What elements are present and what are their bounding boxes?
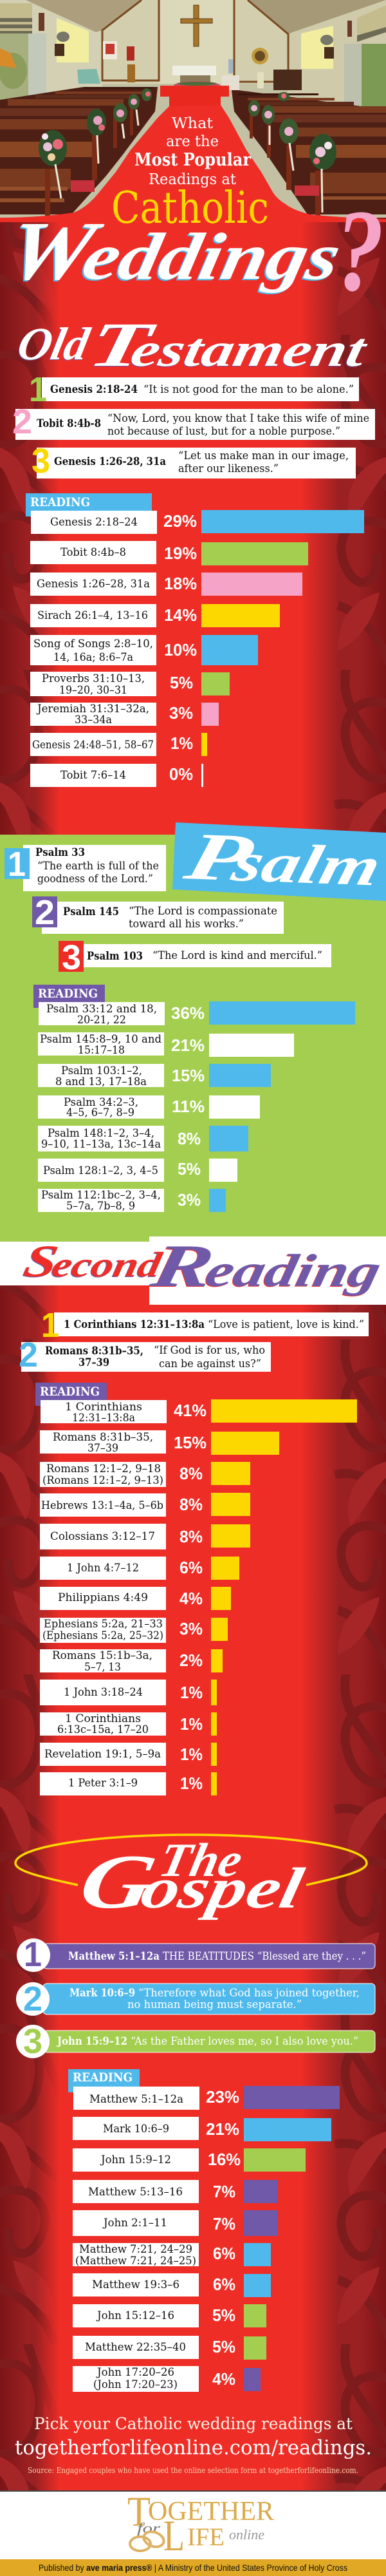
row: Tobit 7: 0%: [169, 764, 193, 784]
row: John 15:12: 5%: [212, 2306, 235, 2325]
heading: The Gospel with halo: The: [154, 1834, 247, 1887]
row: 1 John 4: 6%: [179, 1558, 203, 1577]
row: John 15:9: 16%: [208, 2150, 241, 2169]
top second reading 1: 1 Corinthians 12:31–13:8a: [64, 1318, 205, 1331]
row: Romans 8: 15%: [174, 1433, 207, 1452]
reading tab: [33, 985, 105, 1008]
row: John 15:12: [73, 2304, 266, 2327]
row: 1 Peter: 1%: [180, 1774, 203, 1793]
row: Song of Songs: Song of Songs 2:8–10,: [33, 638, 153, 650]
row: Psalm 33: [39, 1001, 355, 1027]
top reading 3: after our likeness.”: [178, 462, 279, 475]
row: Ephesians: [40, 1618, 228, 1643]
floral pew decorations: [39, 88, 336, 213]
row: Proverbs: [30, 672, 230, 697]
heading: Second Reading: [0, 1232, 386, 1305]
title line: What are the: What: [172, 115, 214, 132]
top gospel 3: [16, 2022, 375, 2061]
title: [0, 115, 384, 316]
row: Psalm 103: 8 and 13, 17–18a: [55, 1075, 147, 1088]
heading: Psalm banner: [172, 819, 386, 901]
top gospel 3: “As the Father loves me, so I also love you.”: [131, 2035, 358, 2048]
row: Genesis 1:26-28: Genesis 1:26–28, 31a: [37, 578, 150, 591]
top second reading 2: [19, 1336, 271, 1374]
reading tab: READING: [38, 987, 98, 1001]
top psalm 1: [5, 845, 166, 891]
row: Philippians: Philippians 4:49: [58, 1591, 148, 1604]
top psalm 1: 1: [8, 845, 26, 884]
row: Psalm 145: 21%: [171, 1036, 205, 1055]
row: Psalm 103: 15%: [172, 1066, 205, 1085]
top gospel 2: no human being must separate.”: [127, 1998, 302, 2011]
icon: wedding rings: [130, 2529, 166, 2551]
top second reading 2: 2: [19, 1336, 38, 1374]
row: Hebrews: [40, 1493, 250, 1517]
top psalm 3: “The Lord is kind and merciful.”: [152, 949, 322, 962]
top psalm 3: Psalm 103: [87, 950, 143, 962]
row: Tobit 8:4b-8: Tobit 8:4b–8: [60, 546, 126, 559]
heading: Old Testament: T: [83, 310, 161, 380]
row: Romans 12: 8%: [179, 1464, 203, 1483]
row: Song of Songs: 10%: [164, 640, 197, 659]
top gospel 2: Mark 10:6–9: [69, 1987, 135, 1999]
row: Psalm 145: Psalm 145:8–9, 10 and: [40, 1033, 161, 1046]
row: Jeremiah: 33–34a: [75, 714, 112, 726]
row: Psalm 112: [38, 1189, 226, 1213]
row: Matthew 5:1: Matthew 5:1–12a: [89, 2093, 183, 2106]
row: Psalm 145: [38, 1032, 294, 1057]
logo: Together for Life online: online: [229, 2526, 264, 2543]
logo: Together for Life online: T: [127, 2488, 151, 2535]
publisher bar: [0, 2559, 386, 2576]
row: Matthew 7: [73, 2243, 271, 2268]
row: Matthew 7: (Matthew 7:21, 24–25): [75, 2255, 196, 2268]
heading: Old Testament: [14, 310, 375, 380]
row: Proverbs: Proverbs 31:10–13,: [42, 672, 145, 685]
reading tab: [26, 493, 152, 516]
bar chart: Gospel readings: [68, 2069, 340, 2392]
row: Colossians: Colossians 3:12–17: [50, 1530, 155, 1543]
top second reading 2: can be against us?”: [159, 1358, 261, 1370]
top second reading 1: “Love is patient, love is kind.”: [208, 1318, 364, 1331]
heading: Psalm banner: salm: [226, 831, 386, 897]
top reading 2: not because of lust, but for a noble purpose.”: [107, 425, 340, 438]
row: Song of Songs: [30, 635, 258, 665]
row: Psalm 128: 5%: [178, 1159, 201, 1179]
heading: Old Testament: Old: [14, 318, 95, 370]
row: Psalm 148: 8%: [178, 1129, 201, 1148]
heading: The Gospel with halo: G: [73, 1839, 163, 1925]
row: Colossians: 8%: [179, 1527, 203, 1546]
row: 1 Corinthians 12: 1 Corinthians: [65, 1401, 142, 1414]
reading tab: READING: [40, 1385, 100, 1399]
row: Revelation: [40, 1743, 217, 1766]
heading: Second Reading: R: [145, 1232, 220, 1300]
row: Psalm 128: [38, 1159, 237, 1182]
call to action: togetherforlifeonline.com/readings.: [15, 2436, 372, 2459]
row: Romans 8: Romans 8:31b–35,: [53, 1431, 153, 1444]
top reading 1: Genesis 2:18-24: [50, 383, 138, 395]
row: Ephesians: (Ephesians 5:2a, 25–32): [42, 1629, 163, 1642]
top psalm 2: toward all his works.”: [129, 918, 244, 931]
row: John 2: John 2:1–11: [102, 2217, 167, 2230]
row: 1 Corinthians 12: [41, 1399, 357, 1425]
row: Jeremiah: [30, 703, 219, 726]
row: Mark: 21%: [206, 2119, 239, 2139]
icon: cross: [181, 5, 212, 46]
row: John 17: (John 17:20–23): [93, 2378, 178, 2391]
row: John 15:12: John 15:12–16: [96, 2309, 174, 2322]
row: Psalm 34: Psalm 34:2–3,: [64, 1096, 138, 1109]
row: Mark: [73, 2117, 331, 2141]
row: Psalm 148: Psalm 148:1–2, 3–4,: [48, 1127, 154, 1140]
row: Romans 8: 37–39: [87, 1442, 118, 1455]
heading: Second Reading: eading: [201, 1245, 386, 1296]
row: Proverbs: 5%: [170, 673, 193, 692]
logo: Together for Life online: IFE: [187, 2523, 225, 2551]
title line: Most Popular Readings at: Most Popular: [134, 150, 252, 170]
row: Tobit 8:4b-8: 19%: [164, 544, 197, 563]
row: 1 John 4: [40, 1557, 239, 1580]
row: John 17: John 17:20–26: [96, 2366, 174, 2379]
halo ellipse: [15, 1835, 367, 1885]
top reading 1: 1: [29, 370, 47, 409]
row: Romans 15: [40, 1649, 223, 1674]
row: 1 Corinthians 6: 1%: [180, 1714, 203, 1734]
top second reading 2: “If God is for us, who: [154, 1344, 265, 1357]
row: Matthew 5:13: [73, 2180, 278, 2203]
row: Genesis 2:18-24: Genesis 2:18–24: [50, 516, 138, 529]
pews right: [232, 90, 386, 217]
row: Romans 12: Romans 12:1–2, 9–18: [46, 1463, 161, 1475]
title word: Weddings: W: [0, 205, 109, 298]
panel: Second Reading top two: [19, 1306, 369, 1374]
top reading 3: “Let us make man in our image,: [178, 450, 349, 462]
row: Matthew 5:13: Matthew 5:13–16: [88, 2186, 183, 2199]
title line: What are the: are the: [166, 133, 219, 150]
row: Matthew 5:1: 23%: [206, 2087, 239, 2107]
top gospel 2: [16, 1980, 375, 2018]
row: Colossians: [40, 1524, 250, 1549]
row: Psalm 33: 36%: [171, 1003, 205, 1023]
row: Romans 8: [40, 1430, 279, 1455]
title line: What are the: [166, 115, 219, 150]
row: Sirach: 14%: [164, 605, 197, 625]
row: Romans 15: 2%: [179, 1651, 203, 1670]
row: John 15:9: [73, 2148, 306, 2172]
row: 1 Corinthians 6: [40, 1712, 217, 1736]
red carpet aisle: [0, 86, 386, 222]
row: John 2: 7%: [213, 2214, 235, 2233]
row: Genesis 2:18-24: 29%: [163, 511, 197, 531]
row: Mark: Mark 10:6–9: [103, 2123, 169, 2136]
bar chart: Psalm readings: [33, 985, 355, 1213]
row: Song of Songs: 14, 16a; 8:6–7a: [53, 651, 133, 664]
logo: Together for Life online: [127, 2488, 274, 2560]
top reading 3: 3: [32, 442, 50, 480]
row: Jeremiah: 3%: [169, 703, 193, 723]
title word: Catholic: Catholic: [111, 183, 269, 234]
title word: Weddings: eddings: [77, 219, 347, 294]
row: Matthew 19: [73, 2273, 271, 2297]
panel: Gospel top three: [16, 1935, 375, 2061]
row: Hebrews: 8%: [179, 1495, 203, 1514]
row: Psalm 148: [38, 1126, 248, 1151]
row: Genesis 1:26-28: 18%: [164, 574, 197, 593]
top second reading 1: 1: [41, 1306, 59, 1345]
heading: Second Reading: econd: [48, 1245, 166, 1285]
row: 1 Corinthians 12: 41%: [174, 1401, 207, 1420]
top psalm 1: goodness of the Lord.”: [37, 873, 153, 886]
panel: Old Testament top three: [12, 370, 375, 480]
row: Romans 12: (Romans 12:1–2, 9–13): [42, 1474, 163, 1487]
heading: Second Reading: S: [20, 1237, 62, 1287]
row: Psalm 33: 20-21, 22: [77, 1014, 126, 1027]
title line: Most Popular Readings at: [134, 150, 252, 188]
top reading 2: 2: [12, 402, 32, 441]
row: Matthew 22: 5%: [212, 2337, 235, 2356]
row: 1 John 4: 1 John 4:7–12: [67, 1562, 139, 1575]
row: 1 Peter: [40, 1772, 217, 1795]
row: Matthew 22: Matthew 22:35–40: [85, 2341, 186, 2354]
row: Matthew 7: 6%: [213, 2244, 235, 2263]
top second reading 2: Romans 8:31b–35,: [45, 1345, 143, 1357]
top psalm 1: Psalm 33: [35, 846, 85, 858]
panel: Psalm section background: [0, 835, 386, 1242]
top second reading 2: 37–39: [78, 1356, 109, 1368]
row: Psalm 33: Psalm 33:12 and 18,: [46, 1003, 157, 1016]
top reading 2: “Now, Lord, you know that I take this wife of mine: [107, 412, 369, 425]
row: 1 John 3: [40, 1680, 217, 1705]
row: Ephesians: 3%: [179, 1619, 203, 1638]
top gospel 3: John 15:9–12: [56, 2035, 127, 2047]
heading: Old Testament: estament: [126, 324, 372, 377]
row: Sirach: [30, 604, 280, 627]
row: Hebrews: Hebrews 13:1–4a, 5–6b: [41, 1499, 163, 1512]
top psalm 3: [59, 938, 331, 977]
publisher bar: Published by ave maria press® | A Ministry of the United States Province of Holy Cross: [39, 2562, 347, 2573]
top psalm 2: [32, 893, 284, 934]
row: Psalm 34: 11%: [172, 1097, 205, 1116]
top psalm 2: “The Lord is compassionate: [129, 905, 277, 918]
row: Psalm 112: Psalm 112:1bc–2, 3–4,: [41, 1189, 161, 1202]
row: Genesis 24: [30, 733, 207, 756]
row: Psalm 103: [38, 1064, 271, 1088]
row: Philippians: 4%: [179, 1589, 203, 1608]
row: 1 Peter: 1 Peter 3:1–9: [68, 1777, 138, 1790]
top psalm 2: Psalm 145: [63, 905, 119, 918]
top reading 3: Genesis 1:26-28, 31a: [54, 455, 166, 468]
hero photo: church interior: [0, 0, 386, 222]
top gospel 1: Matthew 5:1–12a: [68, 1950, 160, 1962]
reading tab: [35, 1383, 107, 1406]
title line: Most Popular Readings at: Readings at: [149, 171, 237, 188]
row: Psalm 34: [38, 1095, 260, 1119]
top gospel 2: 2: [23, 1980, 42, 2018]
reading tab: [68, 2069, 140, 2092]
row: Romans 15: Romans 15:1b–3a,: [52, 1649, 152, 1662]
row: Romans 12: [40, 1462, 250, 1487]
top gospel 1: [17, 1935, 375, 1974]
row: Jeremiah: Jeremiah 31:31–32a,: [36, 703, 149, 715]
row: Matthew 5:13: 7%: [213, 2182, 235, 2201]
logo: Together for Life online: OGETHER: [148, 2497, 274, 2526]
row: John 2: [73, 2210, 278, 2236]
reading tab: READING: [73, 2070, 133, 2085]
row: Psalm 103: Psalm 103:1–2,: [61, 1065, 142, 1077]
footer white panel: [0, 2490, 386, 2559]
row: Philippians: [40, 1587, 231, 1610]
row: Tobit 7: [30, 764, 203, 787]
row: Matthew 7: Matthew 7:21, 24–29: [79, 2243, 192, 2256]
row: John 17: [73, 2366, 261, 2392]
reading tab: READING: [30, 495, 90, 509]
row: John 17: 4%: [212, 2369, 235, 2389]
top psalm 3: 3: [62, 938, 81, 977]
row: Revelation: 1%: [180, 1745, 203, 1764]
row: Tobit 7: Tobit 7:6–14: [60, 769, 126, 782]
call to action: Pick your Catholic wedding readings at: [34, 2414, 353, 2433]
logo: Together for Life online: for: [137, 2520, 161, 2536]
row: Revelation: Revelation 19:1, 5–9a: [44, 1748, 161, 1761]
top reading 2: Tobit 8:4b-8: [37, 417, 101, 430]
row: Matthew 5:1: [73, 2086, 340, 2110]
row: Psalm 148: 9–10, 11–13a, 13c–14a: [41, 1138, 161, 1151]
row: Tobit 8:4b-8: [30, 541, 308, 565]
row: Matthew 19: Matthew 19:3–6: [92, 2278, 179, 2291]
bar chart: Second Reading readings: [35, 1383, 357, 1795]
row: Matthew 22: [73, 2336, 266, 2360]
top gospel 2: “Therefore what God has joined together,: [138, 1987, 360, 2000]
top second reading 1: [41, 1306, 369, 1345]
row: Psalm 128: Psalm 128:1–2, 3, 4–5: [43, 1164, 158, 1177]
row: Psalm 34: 4–5, 6–7, 8–9: [66, 1106, 134, 1119]
top reading 3: [32, 442, 356, 480]
heading: Psalm banner: P: [178, 819, 261, 895]
row: Sirach: Sirach 26:1–4, 13–16: [37, 609, 148, 622]
row: Ephesians: Ephesians 5:2a, 21–33: [44, 1618, 163, 1631]
heading: The Gospel with halo: [15, 1834, 367, 1925]
call to action: [15, 2414, 372, 2459]
bar chart: Old Testament readings: [26, 493, 364, 787]
row: John 15:9: John 15:9–12: [100, 2154, 171, 2166]
row: Genesis 2:18-24: [31, 510, 364, 534]
top reading 1: “It is not good for the man to be alone.”: [143, 383, 354, 396]
row: 1 Corinthians 6: 6:13c–15a, 17–20: [57, 1723, 149, 1736]
row: Proverbs: 19–20, 30–31: [59, 684, 127, 697]
pews left: [0, 87, 158, 218]
row: 1 John 3: 1 John 3:18–24: [64, 1686, 143, 1699]
row: Psalm 112: 5–7a, 7b–8, 9: [66, 1200, 135, 1213]
top reading 1: [29, 370, 359, 409]
row: 1 John 3: 1%: [180, 1683, 203, 1702]
row: Psalm 145: 15:17–18: [78, 1044, 125, 1057]
row: 1 Corinthians 12: 12:31–13:8a: [72, 1412, 135, 1425]
row: Psalm 112: 3%: [178, 1190, 201, 1209]
row: 1 Corinthians 6: 1 Corinthians: [65, 1712, 141, 1725]
heading: The Gospel with halo: ospel: [136, 1856, 309, 1920]
top gospel 3: 3: [23, 2022, 42, 2061]
row: Matthew 19: 6%: [213, 2275, 235, 2294]
logo: Together for Life online: L: [163, 2511, 185, 2560]
panel: Psalm top three: [5, 845, 331, 977]
top reading 2: [12, 402, 375, 441]
top psalm 2: 2: [35, 893, 55, 932]
row: Genesis 24: Genesis 24:48–51, 58–67: [32, 739, 154, 752]
row: Romans 15: 5–7, 13: [84, 1661, 121, 1674]
row: Genesis 24: 1%: [170, 734, 193, 753]
top gospel 1: 1: [24, 1935, 42, 1974]
row: Genesis 1:26-28: [30, 573, 302, 596]
top psalm 1: “The earth is full of the: [37, 860, 159, 873]
